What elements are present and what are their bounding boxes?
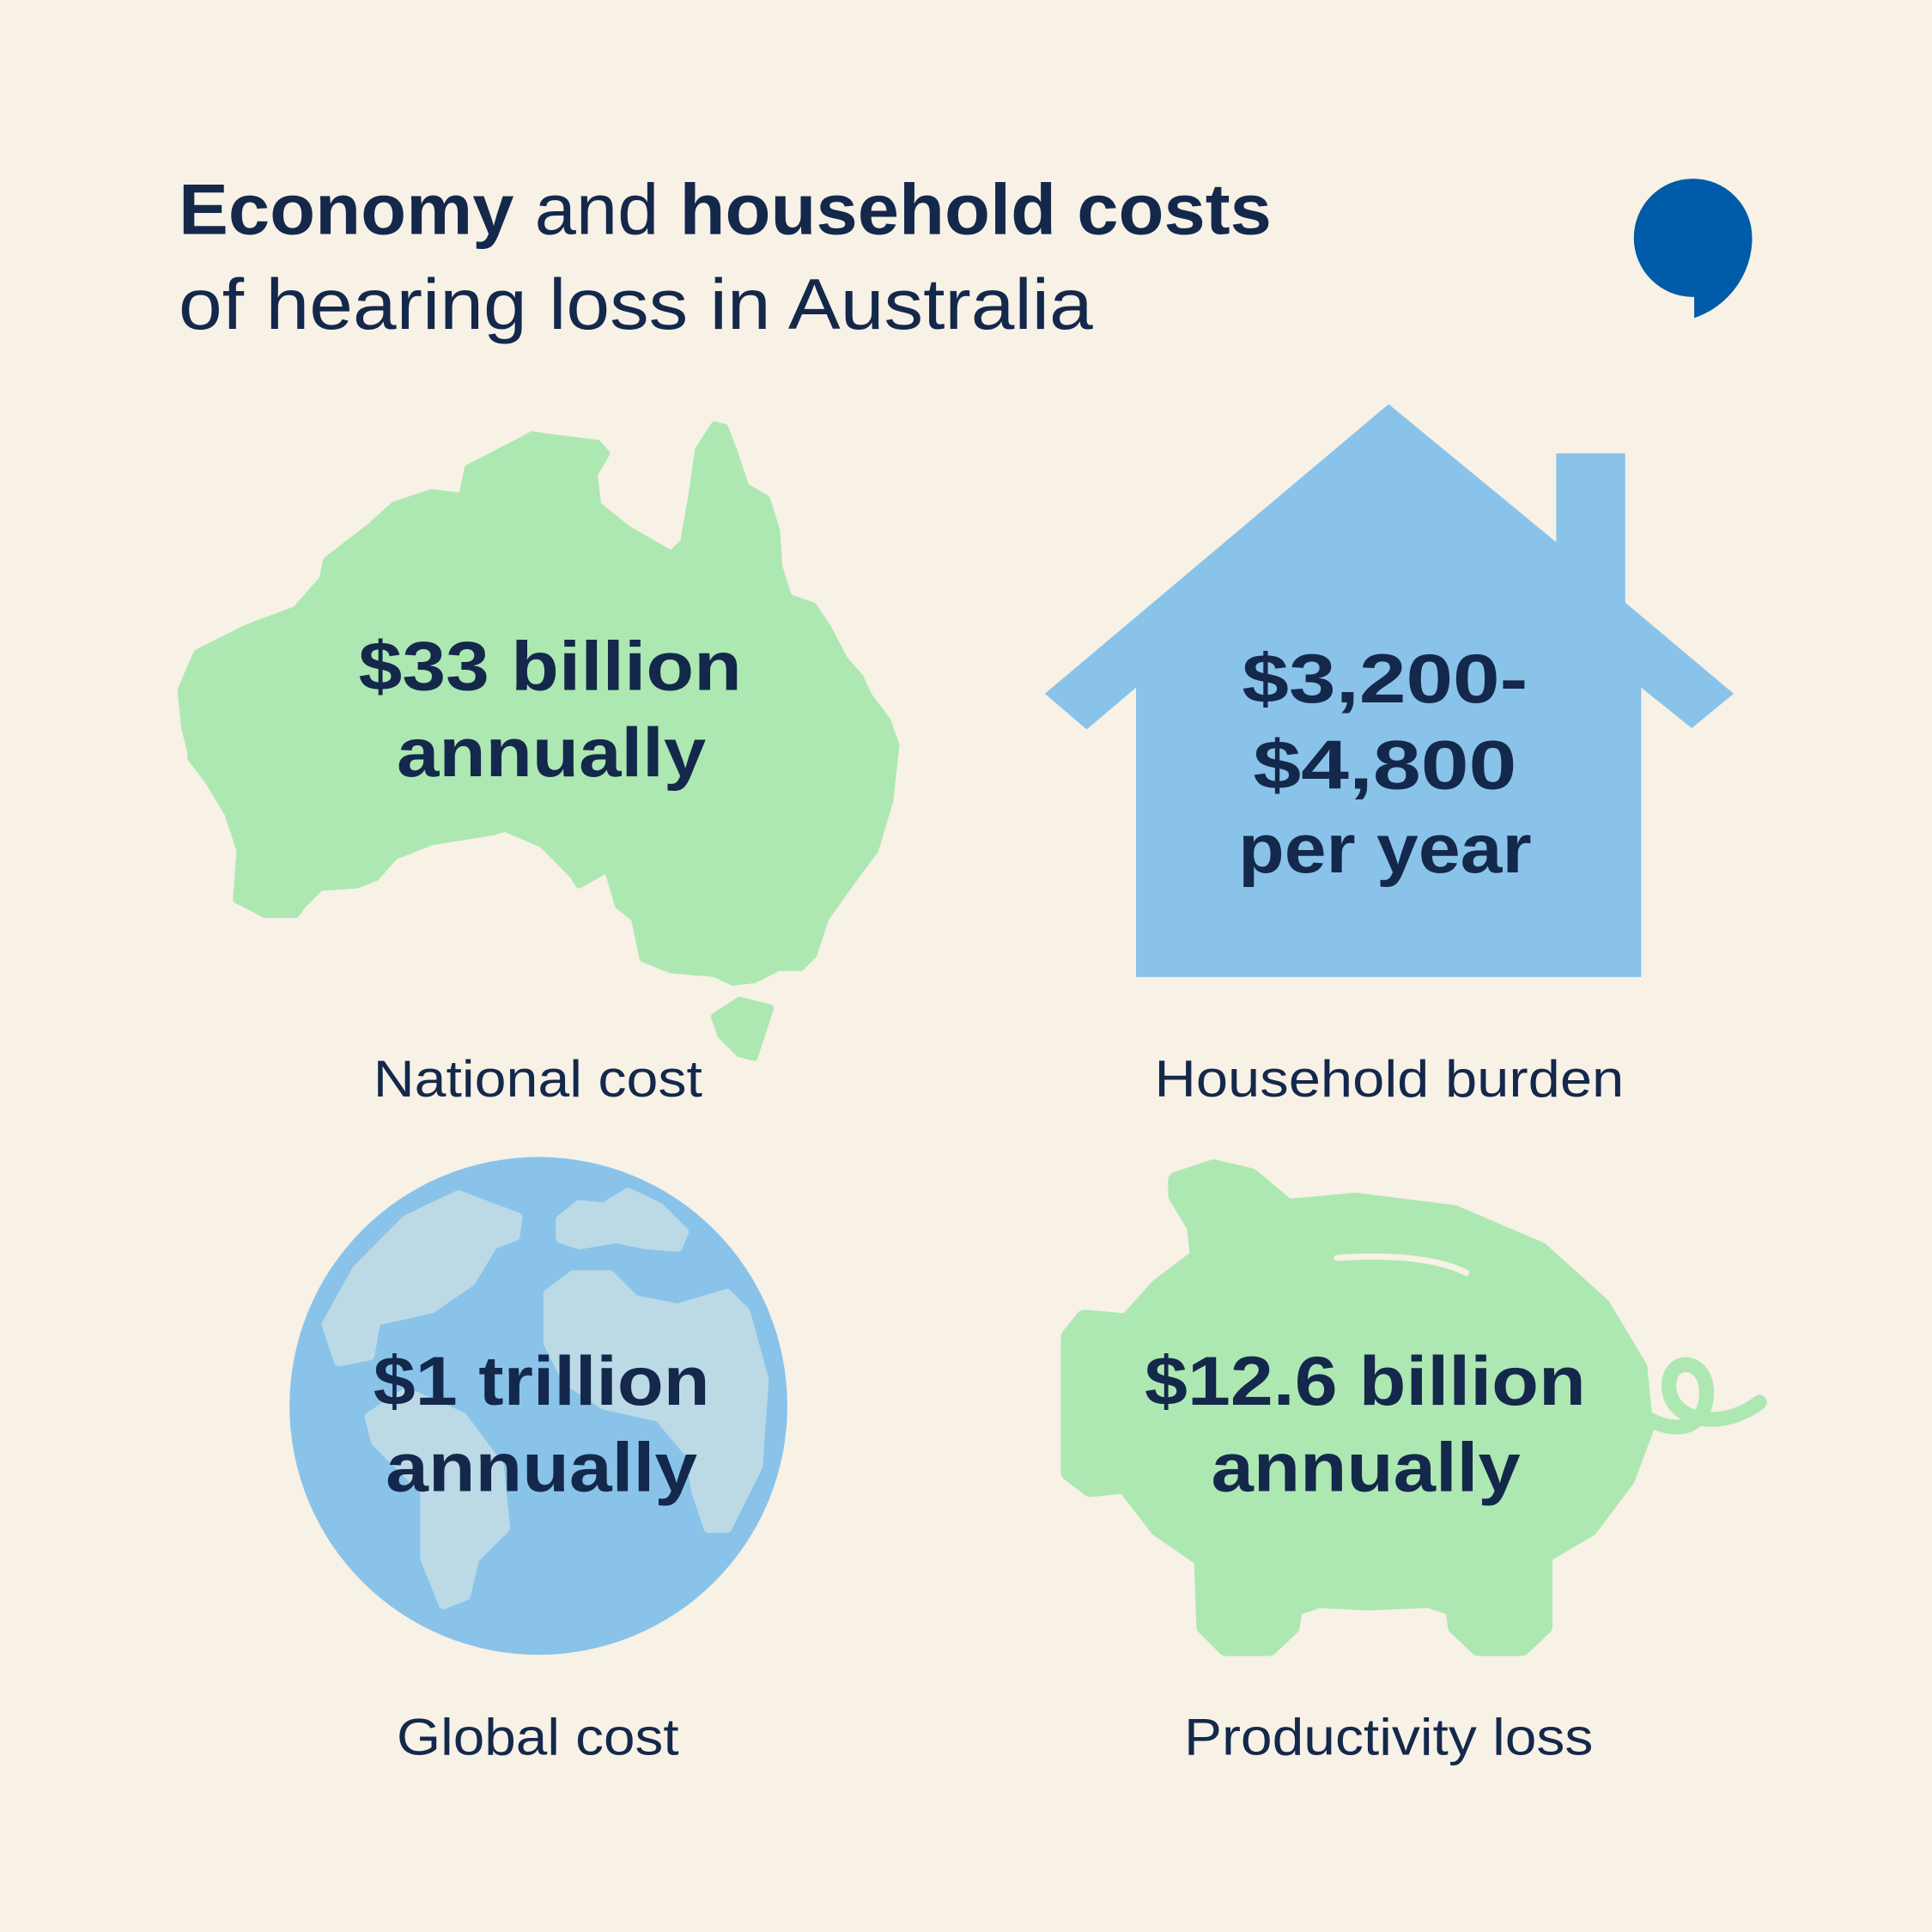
title xyxy=(179,170,1272,344)
title: of hearing loss in Australia xyxy=(179,264,1094,344)
stat: $33 billion: $33 billion xyxy=(359,629,742,706)
panel: national cost xyxy=(181,425,896,1108)
stat: $3,200-$4,800: $4,800 xyxy=(1253,726,1516,804)
stat: $1 trillion xyxy=(374,1343,710,1506)
stat: $12.6 billion xyxy=(1145,1343,1586,1506)
label: national cost: National cost xyxy=(374,1049,702,1108)
stat: $3,200-$4,800 xyxy=(1238,641,1532,888)
stat: $1 trillion: annually xyxy=(386,1429,698,1506)
panel: household burden xyxy=(1045,404,1734,1108)
icon: house xyxy=(1045,404,1734,977)
stat: $12.6 billion: $12.6 billion xyxy=(1145,1343,1586,1420)
panel: productivity loss xyxy=(1070,1168,1759,1765)
icon: globe xyxy=(289,1157,787,1655)
label: household burden: Household burden xyxy=(1155,1049,1624,1108)
stat: $12.6 billion: annually xyxy=(1212,1429,1521,1506)
title: Economy and household costs xyxy=(179,170,1272,250)
stat: $3,200-$4,800: $3,200- xyxy=(1242,641,1528,718)
icon: logo speech bubble xyxy=(1634,179,1752,318)
stat: $33 billion xyxy=(359,629,742,792)
label: global cost: Global cost xyxy=(397,1707,679,1765)
icon: piggy bank xyxy=(1070,1168,1759,1648)
stat: $1 trillion: $1 trillion xyxy=(374,1343,710,1420)
stat: $33 billion: annually xyxy=(397,714,707,792)
stat: $3,200-$4,800: per year xyxy=(1238,811,1532,888)
label: productivity loss: Productivity loss xyxy=(1184,1707,1593,1765)
panel: global cost xyxy=(289,1157,787,1765)
icon: Australia map xyxy=(181,425,896,1057)
